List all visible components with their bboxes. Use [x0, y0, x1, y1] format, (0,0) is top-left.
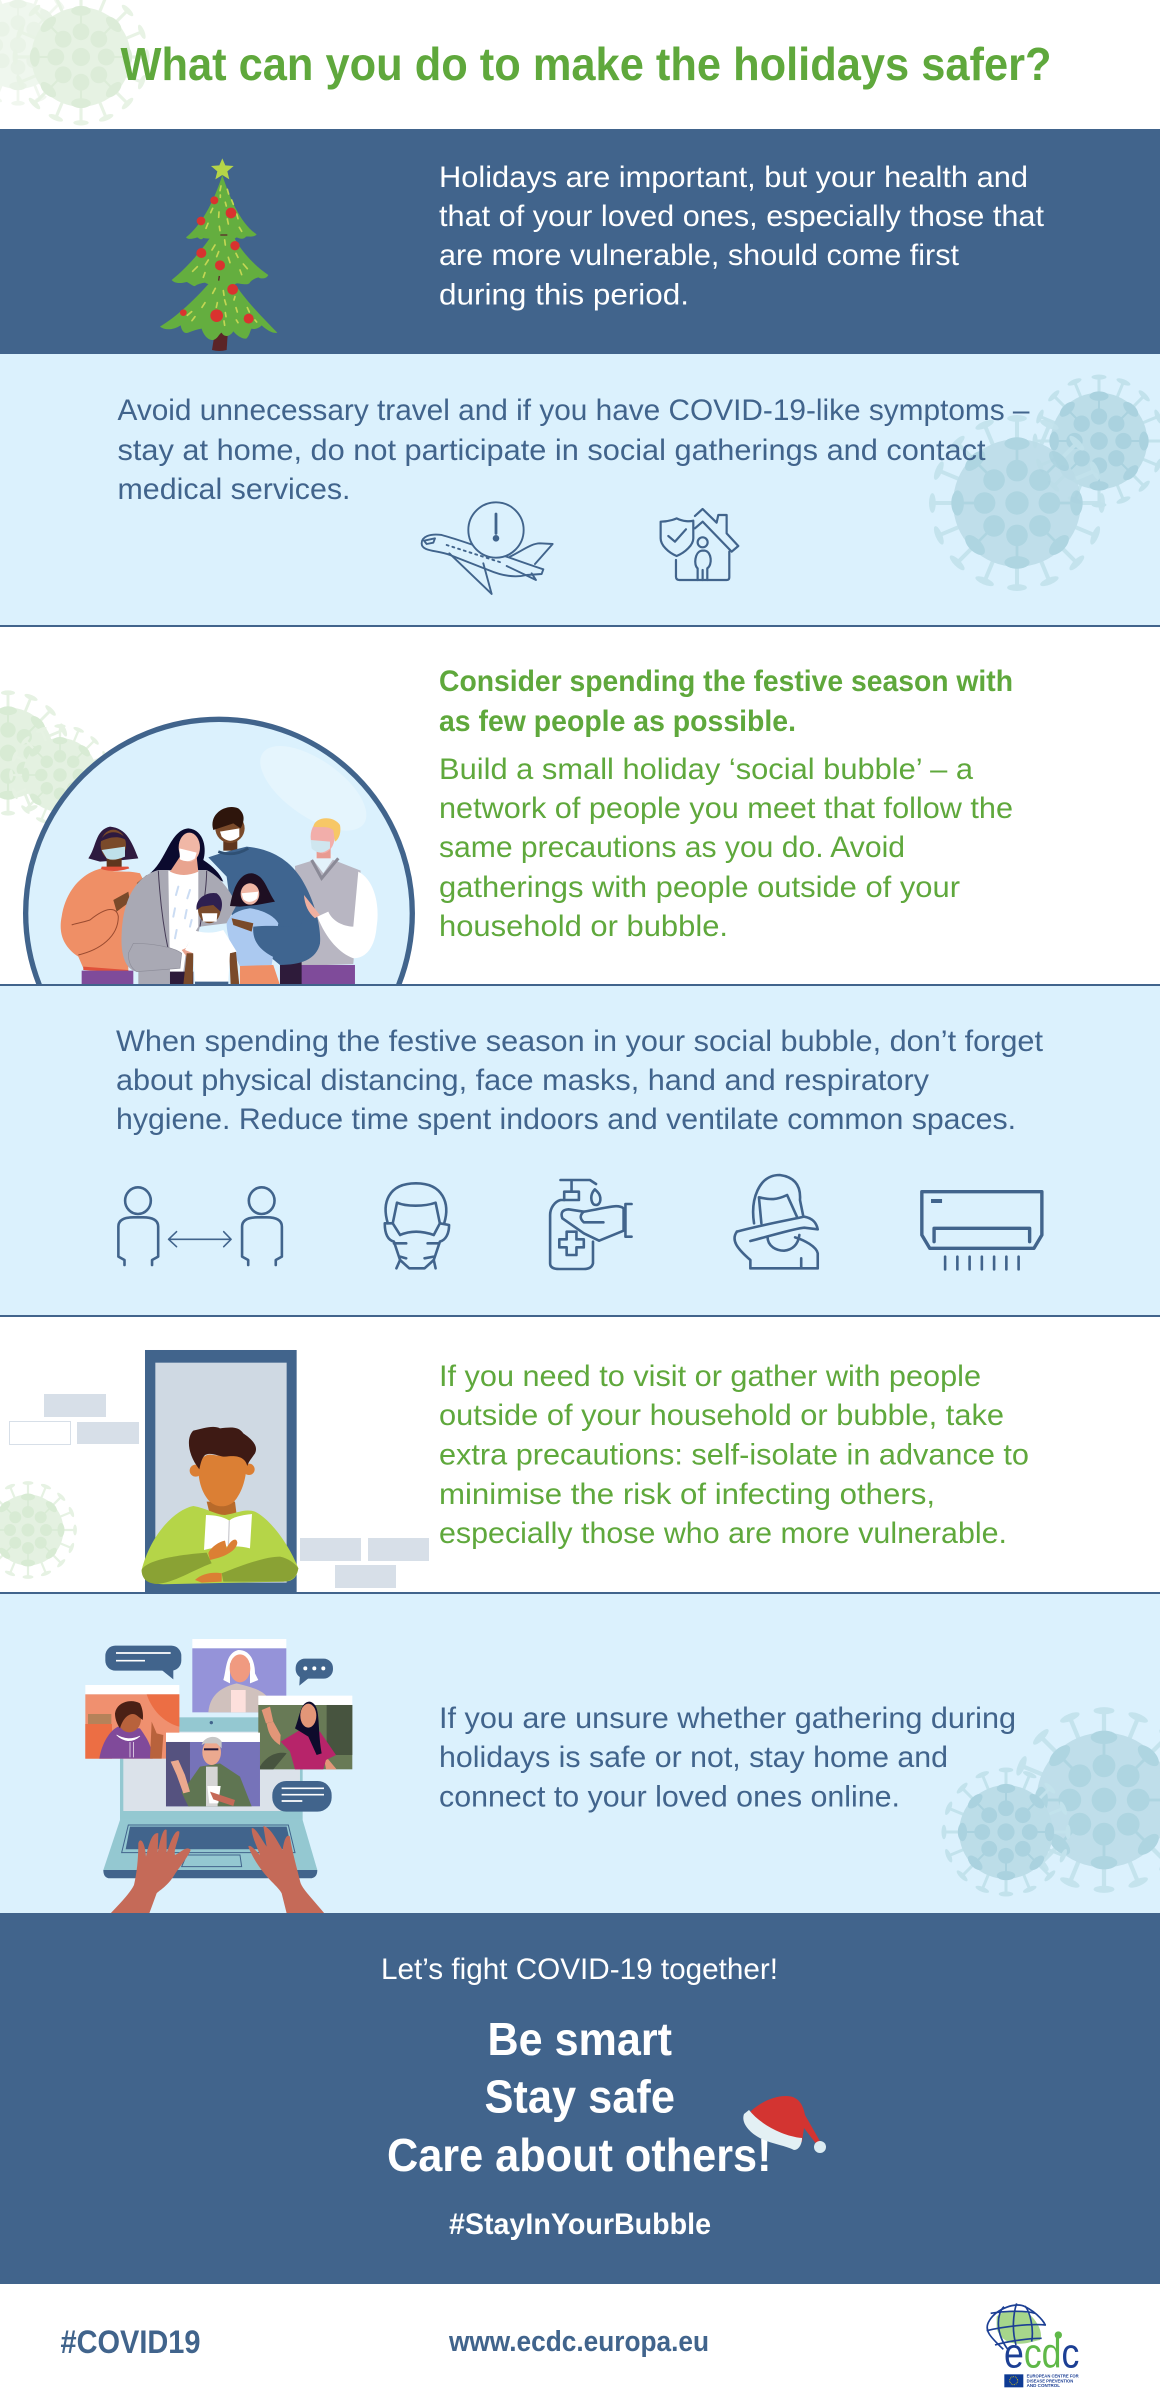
precautions text — [116, 1025, 1043, 1136]
bubble body text: network of people you meet that follow the — [439, 792, 1013, 825]
travel text — [118, 394, 1030, 506]
intro text: Holidays are important, but your health and — [439, 161, 1028, 194]
window: man with cup — [166, 1733, 260, 1742]
bubble body text: Build a small holiday ‘social bubble’ – a — [439, 753, 974, 786]
extra precautions text: If you need to visit or gather with people — [439, 1360, 981, 1393]
extra precautions text: minimise the risk of infecting others, — [439, 1478, 935, 1511]
bubble heading — [439, 665, 1013, 738]
intro text — [439, 161, 1044, 312]
panel: closing call to action — [0, 1913, 1160, 2284]
older man — [295, 857, 361, 966]
logo: ecdc — [987, 2303, 1079, 2388]
icon: christmas tree — [160, 158, 277, 351]
slogans: Care about others! — [387, 2129, 772, 2181]
extra precautions text: extra precautions: self-isolate in advance to — [439, 1438, 1029, 1472]
icon: physical distancing — [118, 1187, 282, 1265]
virus decoration: top left — [0, 0, 149, 125]
chat bubbles — [105, 1646, 181, 1671]
typing hands — [111, 1829, 191, 1913]
window: woman waving — [258, 1696, 352, 1705]
panel: intro band — [0, 129, 1160, 354]
panel: footer — [0, 2284, 1160, 2404]
slogans — [387, 2013, 772, 2181]
virus decoration: right — [929, 374, 1160, 591]
panel: avoid travel — [0, 354, 1160, 625]
window: older woman — [192, 1639, 286, 1648]
bubble body text: same precautions as you do. Avoid — [439, 831, 905, 864]
bubble heading: Consider spending the festive season with — [439, 665, 1013, 698]
icon: cough into elbow — [735, 1175, 818, 1268]
girl — [230, 873, 275, 907]
online text: If you are unsure whether gathering during — [439, 1702, 1016, 1735]
call to action intro: Let’s fight COVID-19 together! — [381, 1953, 778, 1986]
virus decoration: lower right — [941, 1707, 1160, 1897]
icon: air conditioner — [922, 1192, 1042, 1269]
virus decoration: lower left — [0, 1481, 77, 1579]
online text: holidays is safe or not, stay home and — [439, 1741, 948, 1774]
icon: face mask — [385, 1183, 449, 1268]
logo: ecdc: DISEASE PREVENTION — [1027, 2378, 1073, 2383]
bubble body text — [439, 753, 1013, 943]
slogans: Be smart — [488, 2013, 672, 2065]
bricks — [10, 1394, 429, 1588]
bubble body text: gatherings with people outside of your — [439, 871, 960, 904]
panel: precautions — [0, 984, 1160, 1315]
travel text: medical services. — [118, 473, 350, 506]
illustration: person reading in doorway — [142, 1350, 298, 1593]
travel text: Avoid unnecessary travel and if you have COVID-19-like symptoms – — [118, 394, 1030, 427]
title: What can you do to make the holidays safer? — [120, 38, 1052, 90]
logo: ecdc: ecdc — [1004, 2329, 1079, 2376]
intro text: are more vulnerable, should come first — [439, 239, 959, 272]
woman in cardigan — [150, 828, 223, 882]
precautions text: about physical distancing, face masks, hand and respiratory — [116, 1064, 929, 1097]
extra precautions text: outside of your household or bubble, take — [439, 1399, 1004, 1432]
bubble body text: household or bubble. — [439, 910, 728, 943]
slogans: Stay safe — [484, 2071, 675, 2123]
online text — [439, 1702, 1016, 1814]
logo: ecdc: EUROPEAN CENTRE FOR — [1027, 2374, 1079, 2379]
logo: ecdc: AND CONTROL — [1027, 2383, 1060, 2388]
window: person in hoodie — [85, 1685, 179, 1694]
intro text: that of your loved ones, especially those that — [439, 200, 1044, 233]
boy — [198, 905, 220, 924]
icon: home and shield — [661, 509, 738, 580]
illustration: family in bubble — [23, 716, 415, 984]
icon: santa hat — [743, 2096, 826, 2153]
panel: extra precautions — [0, 1315, 1160, 1593]
extra precautions text: especially those who are more vulnerable. — [439, 1517, 1007, 1550]
icon: hand sanitiser — [550, 1180, 632, 1269]
bubble heading: as few people as possible. — [439, 705, 796, 738]
intro text: during this period. — [439, 278, 689, 312]
left woman — [88, 827, 138, 862]
travel text: stay at home, do not participate in social gatherings and contact — [118, 434, 986, 467]
divider line — [0, 625, 1160, 627]
hashtag: #StayInYourBubble — [449, 2208, 711, 2241]
precautions text: When spending the festive season in your social bubble, don’t forget — [116, 1025, 1043, 1058]
covid hashtag: #COVID19 — [60, 2324, 200, 2360]
panel: title header — [0, 0, 1051, 125]
icon: airplane with warning — [422, 502, 553, 594]
precautions text: hygiene. Reduce time spent indoors and ventilate common spaces. — [116, 1103, 1016, 1136]
virus decoration: left — [0, 690, 111, 826]
extra precautions text — [439, 1360, 1029, 1550]
illustration: video call on laptop — [85, 1639, 352, 1913]
website: www.ecdc.europa.eu — [448, 2326, 709, 2358]
tall man — [280, 962, 302, 984]
man's arm — [253, 926, 320, 957]
panel: social bubble — [0, 670, 1012, 984]
panel: stay home online — [0, 1592, 1160, 1913]
online text: connect to your loved ones online. — [439, 1780, 900, 1814]
